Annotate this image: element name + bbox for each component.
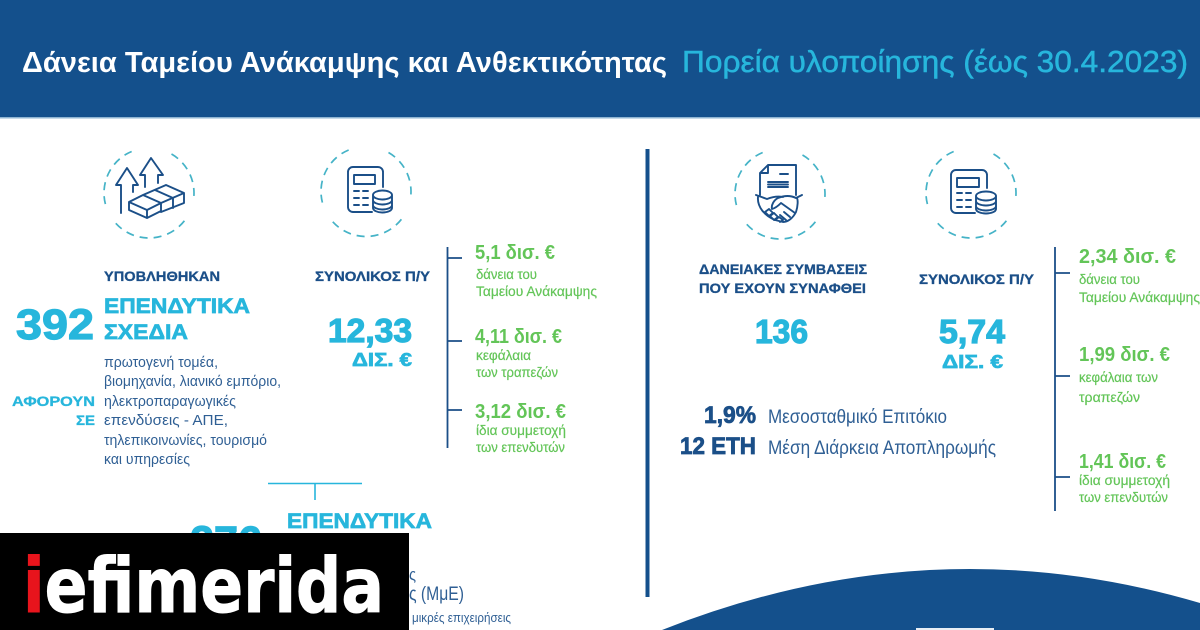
bracket: budget breakdown xyxy=(1055,247,1070,511)
breakdown: bank capital: κεφάλαια xyxy=(476,348,531,363)
breakdown: bank capital: τραπεζών xyxy=(1079,390,1140,405)
text: sectors xyxy=(104,354,281,468)
breakdown: bank capital: κεφάλαια των xyxy=(1079,370,1158,385)
panel: submitted investment plans xyxy=(12,130,597,625)
icon: contract and handshake xyxy=(719,133,841,255)
breakdown: bank capital xyxy=(475,326,562,380)
text: SMEs: μικρές επιχειρήσεις xyxy=(412,610,511,625)
breakdown: recovery fund loans xyxy=(475,242,597,299)
partly hidden number: 276 xyxy=(190,518,262,566)
text: sectors: επενδύσεις - ΑΠΕ, xyxy=(104,412,228,429)
text: SMEs: ς xyxy=(409,565,416,584)
breakdown: bank capital: των τραπεζών xyxy=(476,365,558,380)
breakdown: investor participation: ίδια συμμετοχή xyxy=(476,423,566,438)
number: total budget: 12,33 xyxy=(328,312,412,349)
label: concern: ΑΦΟΡΟΥΝ xyxy=(12,393,95,409)
icon: calculator and coins xyxy=(910,132,1032,254)
arc footer fragment xyxy=(916,628,994,630)
breakdown: recovery fund loans: 2,34 δισ. € xyxy=(1079,246,1176,268)
text: sectors: βιομηχανία, λιανικό εμπόριο, xyxy=(104,373,281,390)
label: total budget: ΣΥΝΟΛΙΚΟΣ Π/Υ xyxy=(315,268,431,284)
text: SMEs: ς (ΜμΕ) xyxy=(409,584,464,605)
title: Δάνεια Ταμείου Ανάκαμψης και Ανθεκτικότητας xyxy=(22,47,667,79)
breakdown: recovery fund loans: Ταμείου Ανάκαμψης xyxy=(1079,290,1200,305)
text: SMEs xyxy=(409,565,511,625)
stat: average interest rate xyxy=(704,402,947,429)
breakdown: investor participation: των επενδυτών xyxy=(1079,490,1168,505)
breakdown: investor participation xyxy=(475,401,566,455)
panel: signed loan contracts xyxy=(680,132,1200,511)
bracket: budget breakdown xyxy=(448,247,462,448)
breakdown: recovery fund loans: δάνεια του xyxy=(1079,272,1140,287)
breakdown: recovery fund loans xyxy=(1079,246,1200,305)
bottom arc xyxy=(662,569,1200,630)
central divider xyxy=(646,149,650,597)
breakdown: recovery fund loans: δάνεια του xyxy=(476,267,537,282)
icon: calculator and coins xyxy=(305,130,427,253)
text: sectors: πρωτογενή τομέα, xyxy=(104,354,218,371)
heading: investment plans: ΣΧΕΔΙΑ xyxy=(104,321,188,344)
number: total budget: ΔΙΣ. € xyxy=(942,352,1003,372)
big number 392: 392 xyxy=(16,301,94,349)
breakdown: recovery fund loans: Ταμείου Ανάκαμψης xyxy=(476,284,597,299)
number: total budget xyxy=(939,313,1006,372)
heading: investment plans: ΕΠΕΝΔΥΤΙΚΑ xyxy=(104,295,250,318)
stat: average repayment period: 12 ΕΤΗ xyxy=(680,433,756,460)
label: concern: ΣΕ xyxy=(76,412,95,428)
stat: average interest rate: 1,9% xyxy=(704,402,756,429)
heading: lower investment plans: ΕΠΕΝΔΥΤΙΚΑ xyxy=(287,510,432,533)
breakdown: recovery fund loans: 5,1 δισ. € xyxy=(475,242,555,264)
breakdown: investor participation xyxy=(1079,451,1170,505)
text: sectors: τηλεπικοινωνίες, τουρισμό xyxy=(104,432,267,449)
breakdown: investor participation: ίδια συμμετοχή xyxy=(1079,473,1170,488)
label: loan contracts signed: ΔΑΝΕΙΑΚΕΣ ΣΥΜΒΑΣΕΙΣ xyxy=(699,262,867,277)
label: total budget: ΣΥΝΟΛΙΚΟΣ Π/Υ xyxy=(919,271,1035,287)
breakdown: bank capital: 4,11 δισ. € xyxy=(475,326,562,348)
subtitle: Πορεία υλοποίησης (έως 30.4.2023) xyxy=(682,44,1188,79)
stat: average repayment period xyxy=(680,433,996,460)
number: total budget: 5,74 xyxy=(939,313,1006,350)
connector xyxy=(268,484,362,500)
stat: average repayment period: Μέση Διάρκεια Αποπληρωμής xyxy=(768,438,996,459)
logo: iefimerida: iefimerida xyxy=(23,541,384,630)
number: total budget: ΔΙΣ. € xyxy=(352,350,412,370)
label: loan contracts signed: ΠΟΥ ΕΧΟΥΝ ΣΥΝΑΦΘΕΙ xyxy=(699,281,866,296)
breakdown: investor participation: 1,41 δισ. € xyxy=(1079,451,1166,473)
stat: average interest rate: Μεσοσταθμικό Επιτόκιο xyxy=(768,407,947,428)
breakdown: bank capital: 1,99 δισ. € xyxy=(1079,344,1170,366)
big number 136: 136 xyxy=(755,313,808,350)
label: concern xyxy=(12,393,95,428)
label: loan contracts signed xyxy=(699,262,867,296)
heading: investment plans xyxy=(104,295,250,344)
icon: arrows and banknotes xyxy=(88,132,210,254)
breakdown: investor participation: 3,12 δισ. € xyxy=(475,401,566,423)
breakdown: investor participation: των επενδυτών xyxy=(476,440,565,455)
breakdown: bank capital xyxy=(1079,344,1170,405)
header banner xyxy=(0,0,1200,118)
number: total budget xyxy=(328,312,412,370)
text: sectors: και υπηρεσίες xyxy=(104,451,190,468)
text: sectors: ηλεκτροπαραγωγικές xyxy=(104,393,236,410)
label: submitted: ΥΠΟΒΛΗΘΗΚΑΝ xyxy=(104,268,220,284)
